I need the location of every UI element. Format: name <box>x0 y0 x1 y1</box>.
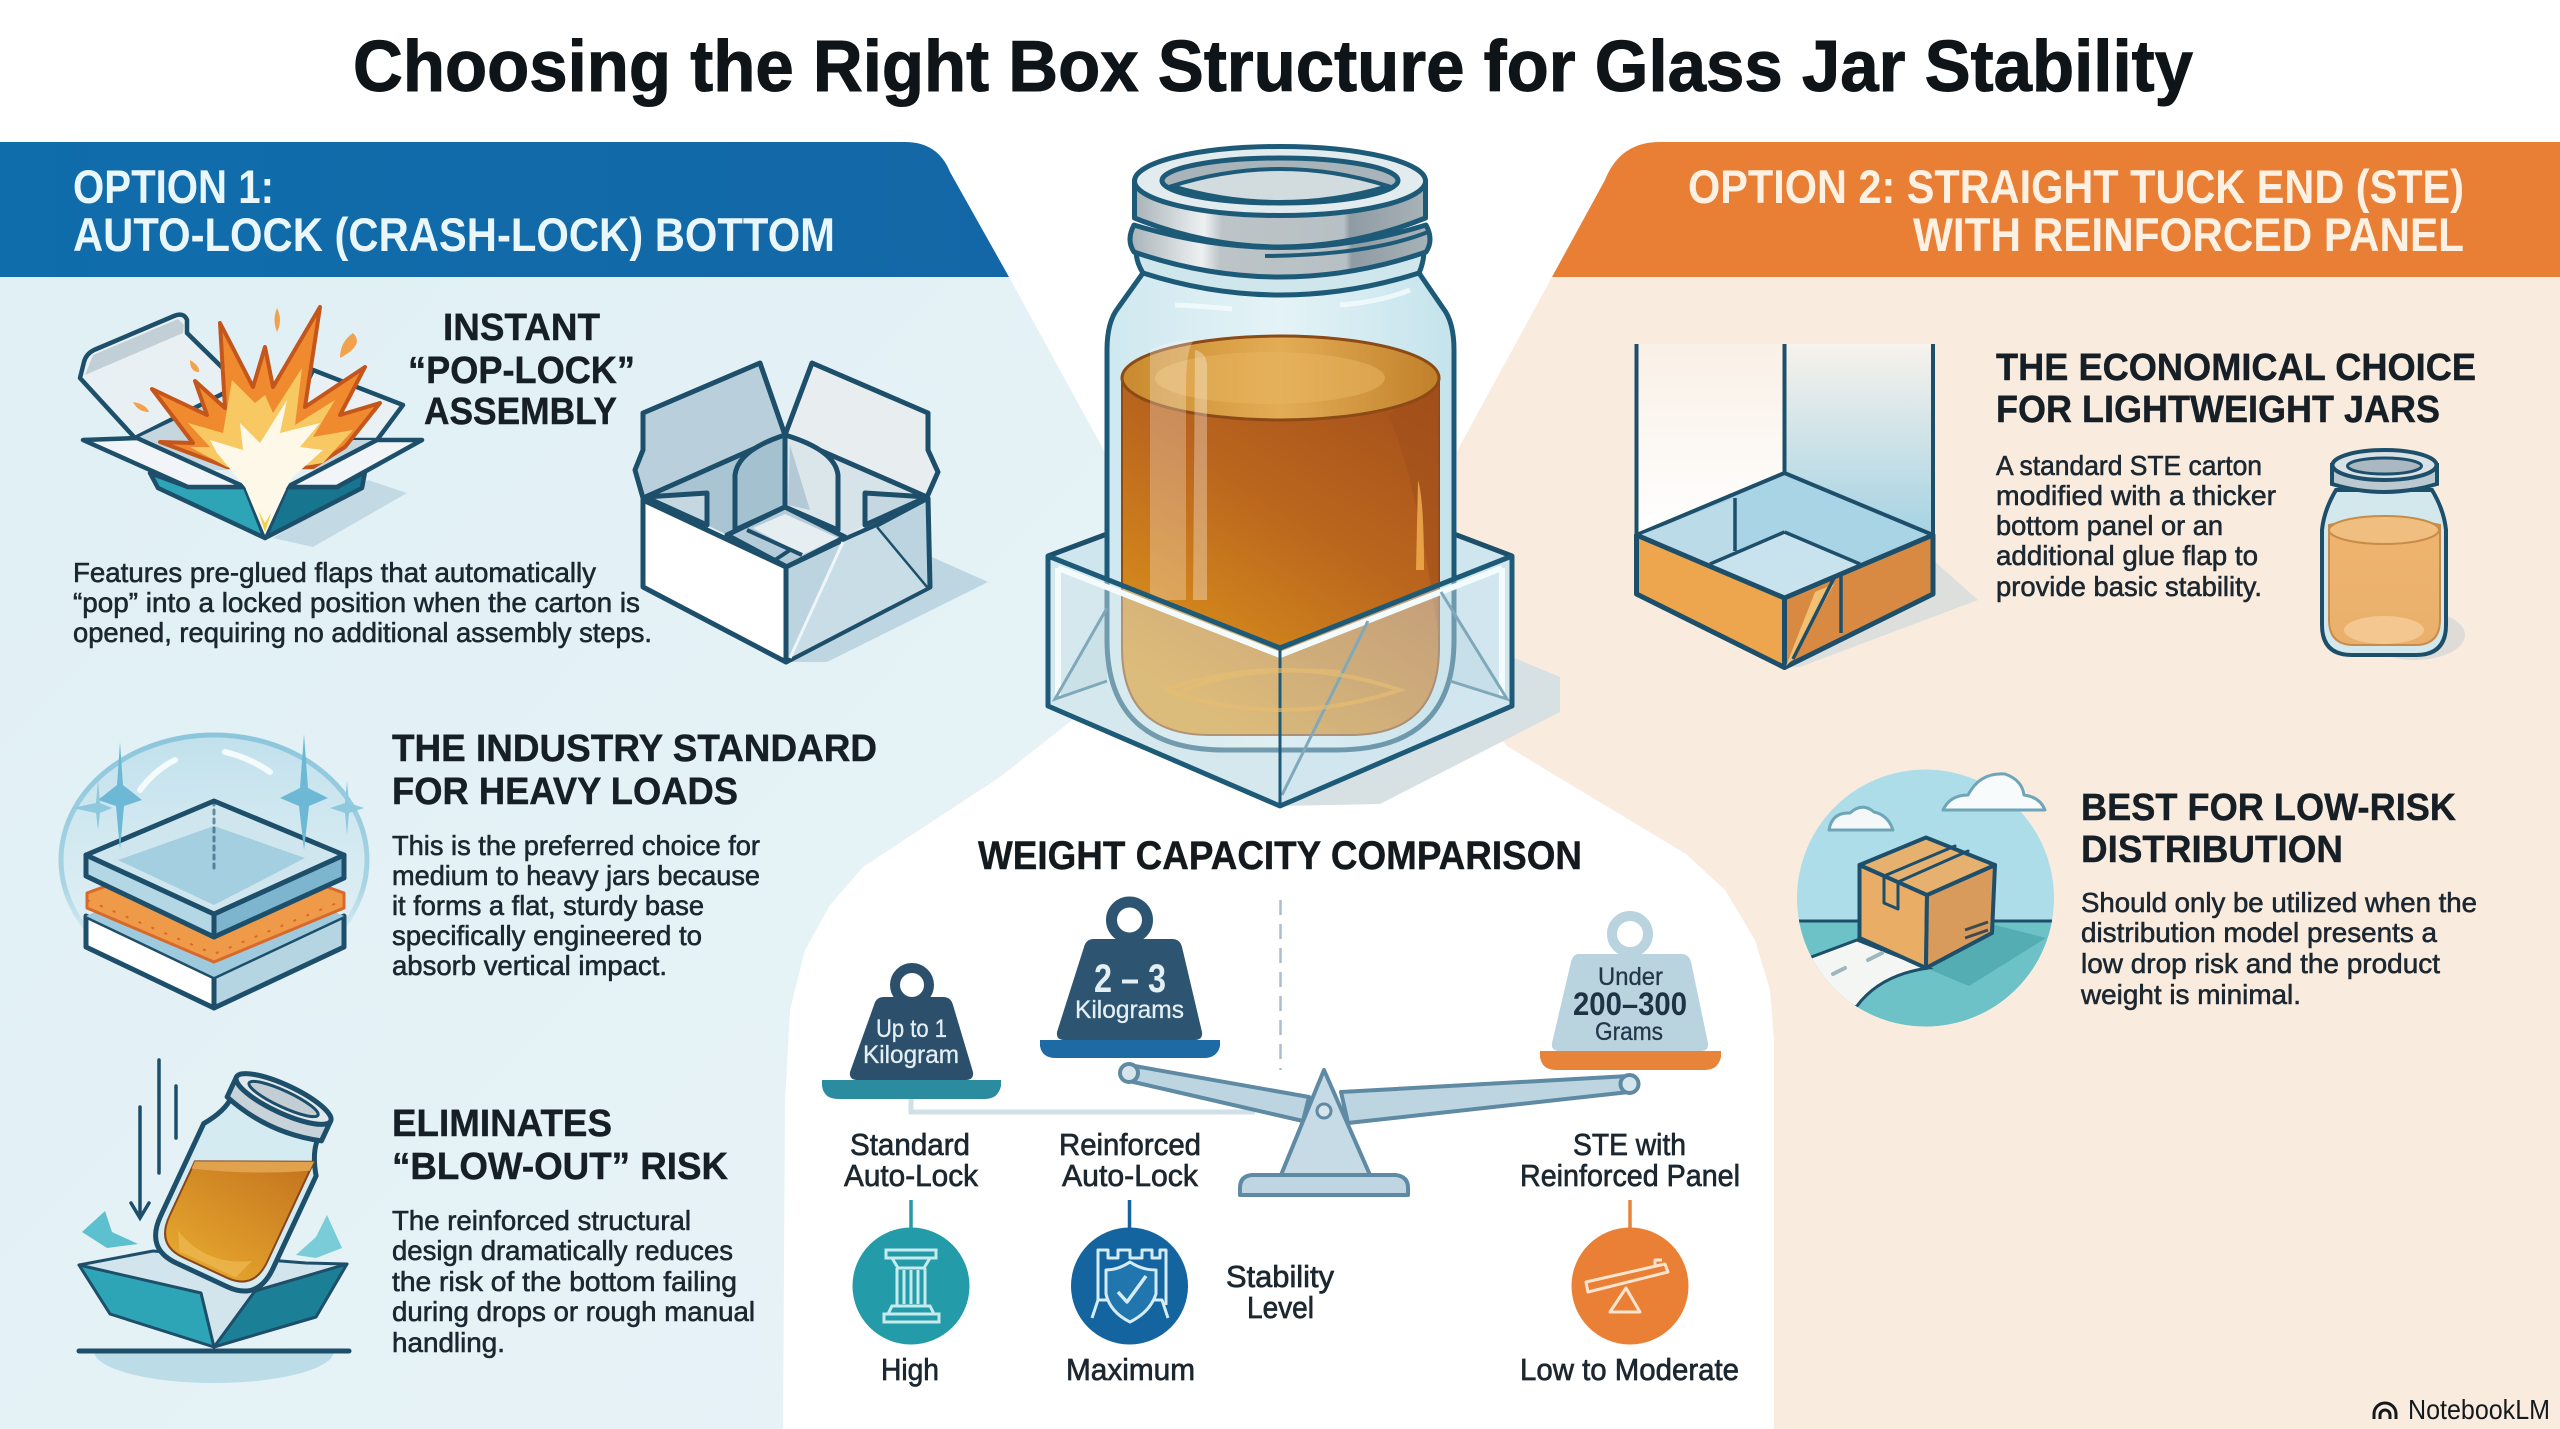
column: standard auto-lock, high stability: High <box>881 1352 939 1387</box>
weight: 2 to 3 kilograms <box>1040 902 1220 1058</box>
glass jar body <box>1107 262 1454 750</box>
weight: under 200-300 grams: Under <box>1598 963 1663 991</box>
header: option 1: OPTION 1: <box>73 160 274 213</box>
icon: small lightweight jar <box>2322 450 2465 660</box>
heading and text: industry standard <box>392 728 877 981</box>
heading and text: industry standard: absorb vertical impact. <box>392 950 667 981</box>
heading and text: eliminates blow-out risk: during drops or rough manual <box>392 1296 755 1327</box>
jar lid <box>1130 146 1430 295</box>
icon: fortress shield <box>1092 1250 1168 1322</box>
description: pop-lock: Features pre-glued flaps that automatically <box>73 557 596 588</box>
icon: falling jar impact <box>79 1060 349 1383</box>
column: STE with reinforced panel, low to moderate stability: Low to Moderate <box>1520 1352 1739 1387</box>
header: option 2 <box>1552 142 2560 277</box>
heading and text: eliminates blow-out risk: The reinforced structural <box>392 1205 691 1236</box>
label: stability level <box>1226 1259 1334 1325</box>
heading and text: eliminates blow-out risk: handling. <box>392 1327 505 1358</box>
heading: instant pop-lock assembly: ASSEMBLY <box>424 391 617 433</box>
heading and text: industry standard: THE INDUSTRY STANDARD <box>392 728 877 770</box>
column: reinforced auto-lock, maximum stability <box>1059 1127 1201 1387</box>
icon: open auto-lock carton <box>635 363 988 662</box>
heading and text: eliminates blow-out risk: “BLOW-OUT” RISK <box>392 1146 729 1188</box>
icon: pop-lock burst box <box>80 307 422 547</box>
heading: instant pop-lock assembly <box>408 307 635 433</box>
weight: 2 to 3 kilograms: Kilograms <box>1075 996 1184 1024</box>
heading and text: economical choice <box>1996 347 2476 602</box>
heading and text: industry standard: specifically engineered to <box>392 920 702 951</box>
balance scale <box>1120 1064 1638 1195</box>
column: reinforced auto-lock, maximum stability: Auto-Lock <box>1062 1158 1198 1193</box>
heading and text: industry standard: it forms a flat, sturdy base <box>392 890 704 921</box>
heading and text: best for low-risk distribution: distribution model presents a <box>2081 917 2437 948</box>
weight: under 200-300 grams: 200–300 <box>1573 986 1687 1022</box>
column: standard auto-lock, high stability <box>844 1127 978 1387</box>
header: option 2: OPTION 2: STRAIGHT TUCK END (STE) <box>1688 160 2464 213</box>
icon: box on road in circle <box>1790 770 2060 1031</box>
icon: layered protected base <box>61 734 367 1008</box>
heading and text: industry standard: medium to heavy jars because <box>392 860 760 891</box>
heading and text: economical choice: bottom panel or an <box>1996 510 2223 541</box>
heading and text: best for low-risk distribution: BEST FOR LOW-RISK <box>2081 787 2457 829</box>
icon: seesaw <box>1586 1260 1668 1312</box>
panel: option 1 auto-lock bottom <box>0 142 1107 1429</box>
column: STE with reinforced panel, low to moderate stability: Reinforced Panel <box>1520 1158 1740 1193</box>
amber liquid <box>1122 378 1439 735</box>
column: reinforced auto-lock, maximum stability: Reinforced <box>1059 1127 1201 1162</box>
heading and text: economical choice: THE ECONOMICAL CHOICE <box>1996 347 2476 389</box>
label: stability level: Stability <box>1226 1259 1334 1294</box>
heading and text: economical choice: FOR LIGHTWEIGHT JARS <box>1996 389 2440 431</box>
heading and text: eliminates blow-out risk <box>392 1103 755 1358</box>
heading and text: best for low-risk distribution <box>2080 787 2477 1010</box>
label: stability level: Level <box>1247 1290 1314 1325</box>
icon: STE carton with reinforced panel <box>1636 344 1978 668</box>
panel: option 2 straight tuck end <box>1457 142 2560 1429</box>
carton front faces <box>1048 556 1512 806</box>
column: standard auto-lock, high stability: Auto-Lock <box>844 1158 978 1193</box>
column: STE with reinforced panel, low to moderate stability: STE with <box>1573 1127 1686 1162</box>
description: pop-lock <box>73 557 652 648</box>
header: option 1 <box>0 142 1009 277</box>
weight: under 200-300 grams: Grams <box>1595 1018 1663 1046</box>
heading and text: economical choice: additional glue flap to <box>1996 540 2258 571</box>
weight: up to 1 kilogram: Kilogram <box>863 1041 959 1069</box>
description: pop-lock: opened, requiring no additional assembly steps. <box>73 617 652 648</box>
heading and text: economical choice: modified with a thicker <box>1996 480 2276 511</box>
description: pop-lock: “pop” into a locked position when the carton is <box>73 587 640 618</box>
heading and text: eliminates blow-out risk: ELIMINATES <box>392 1103 612 1145</box>
heading and text: economical choice: provide basic stability. <box>1996 571 2262 602</box>
heading: weight capacity comparison: WEIGHT CAPACITY COMPARISON <box>978 834 1582 878</box>
heading: instant pop-lock assembly: “POP-LOCK” <box>408 350 635 392</box>
heading: instant pop-lock assembly: INSTANT <box>443 307 600 349</box>
heading and text: best for low-risk distribution: DISTRIBUTION <box>2081 829 2343 871</box>
column: standard auto-lock, high stability: Standard <box>850 1127 970 1162</box>
heading and text: eliminates blow-out risk: the risk of the bottom failing <box>392 1266 737 1297</box>
column: reinforced auto-lock, maximum stability: Maximum <box>1066 1352 1195 1387</box>
weight: up to 1 kilogram: Up to 1 <box>876 1015 947 1043</box>
title: Choosing the Right Box Structure for Glass Jar Stability <box>353 27 2193 107</box>
weight: under 200-300 grams <box>1540 916 1721 1070</box>
column: STE with reinforced panel, low to moderate stability <box>1520 1127 1740 1387</box>
header: option 2: WITH REINFORCED PANEL <box>1913 208 2464 261</box>
heading and text: best for low-risk distribution: low drop risk and the product <box>2081 948 2440 979</box>
panel: weight capacity comparison <box>822 834 1740 1387</box>
header: option 1: AUTO-LOCK (CRASH-LOCK) BOTTOM <box>73 208 835 261</box>
heading and text: eliminates blow-out risk: design dramatically reduces <box>392 1235 733 1266</box>
heading and text: industry standard: FOR HEAVY LOADS <box>392 771 738 813</box>
weight: up to 1 kilogram <box>822 968 1001 1099</box>
weight: 2 to 3 kilograms: 2 – 3 <box>1094 957 1166 1001</box>
heading and text: industry standard: This is the preferred choice for <box>392 830 760 861</box>
central jar in carton <box>1048 146 1560 806</box>
heading and text: best for low-risk distribution: weight is minimal. <box>2080 979 2301 1010</box>
heading and text: economical choice: A standard STE carton <box>1996 450 2262 481</box>
icon: pillar <box>884 1250 939 1322</box>
heading and text: best for low-risk distribution: Should only be utilized when the <box>2081 887 2477 918</box>
